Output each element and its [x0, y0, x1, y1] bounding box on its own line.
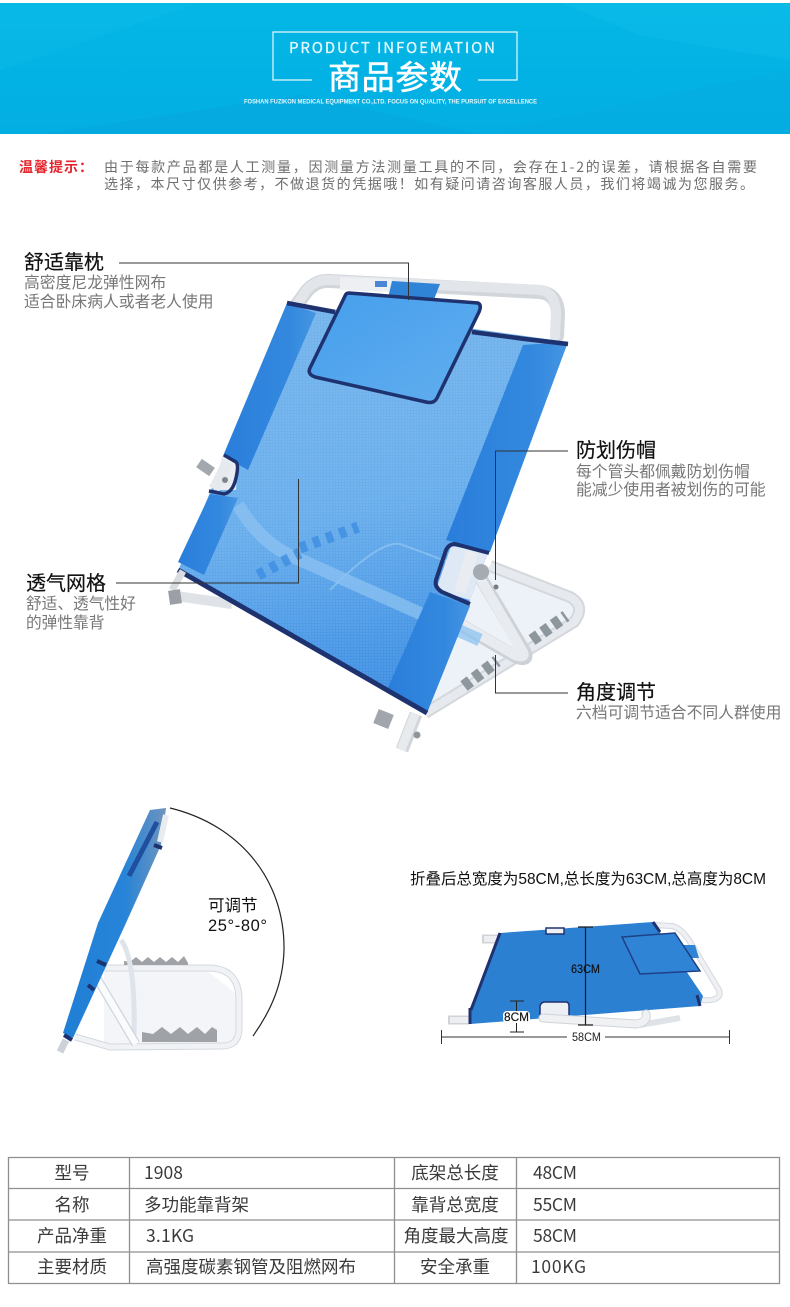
row 1 — [54, 1160, 577, 1185]
callout body: 舒适、透气性好 — [26, 595, 136, 613]
63cm dimension — [571, 927, 600, 1025]
table grid — [8, 1157, 780, 1284]
side top tube — [160, 815, 166, 842]
8cm dimension — [503, 1001, 530, 1032]
top tube — [296, 281, 558, 336]
side bands — [64, 845, 162, 1040]
tube seen through mesh — [238, 505, 480, 640]
callout title: 防划伤帽 — [576, 439, 656, 462]
headrest strap — [388, 281, 440, 302]
header tagline: FOSHAN FUZIKON MEDICAL EQUIPMENT CO.,LTD. FOCUS ON QUALITY, THE PURSUIT OF EXCELLENCE — [244, 98, 537, 106]
leader line — [496, 655, 568, 693]
bottom front foot — [376, 714, 420, 750]
notice label: 温馨提示： — [19, 157, 93, 177]
mesh dot texture — [178, 303, 568, 713]
folded pillow — [622, 933, 700, 974]
callout title: 角度调节 — [576, 681, 656, 704]
adjustment label: 可调节 — [208, 896, 258, 915]
teeth seen through mesh — [258, 527, 358, 575]
leader line — [119, 263, 408, 300]
folded view photo — [442, 922, 730, 1044]
side rear teeth — [124, 956, 188, 965]
row 2 — [54, 1192, 577, 1217]
main product photo: back rest — [172, 277, 579, 750]
header banner — [0, 3, 790, 134]
side support tube — [92, 970, 136, 1044]
side blue panel — [63, 808, 166, 1038]
folded notches — [546, 928, 564, 934]
row 2: 55CM — [533, 1192, 577, 1217]
row 4: 安全承重 — [420, 1254, 490, 1279]
header frame — [273, 32, 517, 80]
callout: mesh — [26, 479, 298, 632]
folding support tube — [440, 548, 526, 659]
folded blue panel — [470, 922, 703, 1024]
callout body: 每个管头都佩戴防划伤帽 — [576, 463, 750, 481]
right bracket notch — [436, 544, 489, 604]
side front teeth — [142, 1027, 217, 1042]
row 2: 靠背总宽度 — [411, 1192, 499, 1217]
row 1: 型号 — [54, 1160, 90, 1185]
folded top tube — [654, 925, 720, 1000]
left bracket notch — [199, 455, 238, 494]
callout: mesh: 的弹性靠背 — [26, 614, 104, 632]
row 4: 高强度碳素钢管及阻燃网布 — [146, 1254, 356, 1279]
top tube label sticker — [340, 277, 392, 292]
adjustment label — [208, 896, 267, 935]
callout: headrest — [24, 251, 408, 311]
navy top edge — [287, 303, 568, 344]
folded strap — [682, 945, 699, 958]
row 1: 48CM — [533, 1160, 577, 1185]
row 2: 多功能靠背架 — [144, 1192, 249, 1217]
callout: headrest: 适合卧床病人或者老人使用 — [24, 293, 214, 311]
folded size caption: 折叠后总宽度为58CM,总长度为63CM,总高度为8CM — [410, 870, 766, 888]
header english title: PRODUCT INFOEMATION — [289, 37, 495, 58]
bottom left foot — [172, 571, 183, 604]
58cm dimension — [442, 1030, 730, 1044]
adjustment arc — [170, 808, 284, 1036]
folded under frame — [640, 1018, 680, 1025]
notice line 2: 选择，本尺寸仅供参考，不做退货的凭据哦！如有疑问请咨询客服人员，我们将竭诚为您服务。 — [104, 174, 754, 194]
folded navy edges — [470, 922, 700, 1024]
8cm dimension: 8CM — [504, 1012, 529, 1024]
base frame — [176, 563, 579, 713]
left lower strip — [178, 494, 238, 575]
specification table — [8, 1157, 780, 1284]
folded left feet — [448, 939, 500, 1020]
left upper strip — [223, 303, 316, 470]
row 3: 58CM — [533, 1223, 577, 1248]
callout: end caps — [496, 439, 766, 580]
side foot — [60, 1040, 66, 1052]
navy bottom edge — [178, 570, 427, 713]
notice text — [19, 157, 757, 194]
callout body: 六档可调节适合不同人群使用 — [576, 704, 781, 722]
callout: angle — [496, 655, 781, 722]
row 3: 产品净重 — [37, 1223, 107, 1248]
callout title: 透气网格 — [26, 572, 106, 595]
notice line 1: 由于每款产品都是人工测量，因测量方法测量工具的不同，会存在1-2的误差，请根据各自需要 — [104, 157, 757, 177]
right lower strip — [386, 592, 470, 713]
callout: end caps: 能减少使用者被划伤的可能 — [576, 481, 766, 499]
callout title: 舒适靠枕 — [24, 251, 104, 274]
row 4: 主要材质 — [37, 1254, 107, 1279]
row 3 — [37, 1223, 577, 1248]
right upper strip — [446, 342, 568, 552]
row 4 — [37, 1254, 586, 1279]
mesh back panel — [178, 303, 568, 713]
side base plate — [104, 970, 238, 1045]
folded lower tube — [543, 1014, 646, 1024]
side rear curve tube — [121, 940, 134, 1040]
row 2: 名称 — [54, 1192, 90, 1217]
side view photo — [60, 808, 284, 1052]
callout body: 高密度尼龙弹性网布 — [24, 274, 166, 292]
header chinese title: 商品参数 — [328, 51, 462, 99]
63cm dimension: 63CM — [571, 964, 600, 976]
row 1: 底架总长度 — [411, 1160, 499, 1185]
leader line — [116, 479, 298, 583]
side base frame — [75, 968, 239, 1047]
row 3: 角度最大高度 — [404, 1223, 508, 1248]
58cm dimension: 58CM — [572, 1032, 601, 1044]
leader line — [496, 451, 568, 580]
side pillow edge — [129, 822, 157, 876]
adjustment label: 25°-80° — [208, 917, 267, 935]
pillow — [309, 293, 480, 402]
row 1: 1908 — [144, 1160, 183, 1185]
row 4: 100KG — [531, 1254, 586, 1279]
row 3: 3.1KG — [146, 1223, 194, 1248]
